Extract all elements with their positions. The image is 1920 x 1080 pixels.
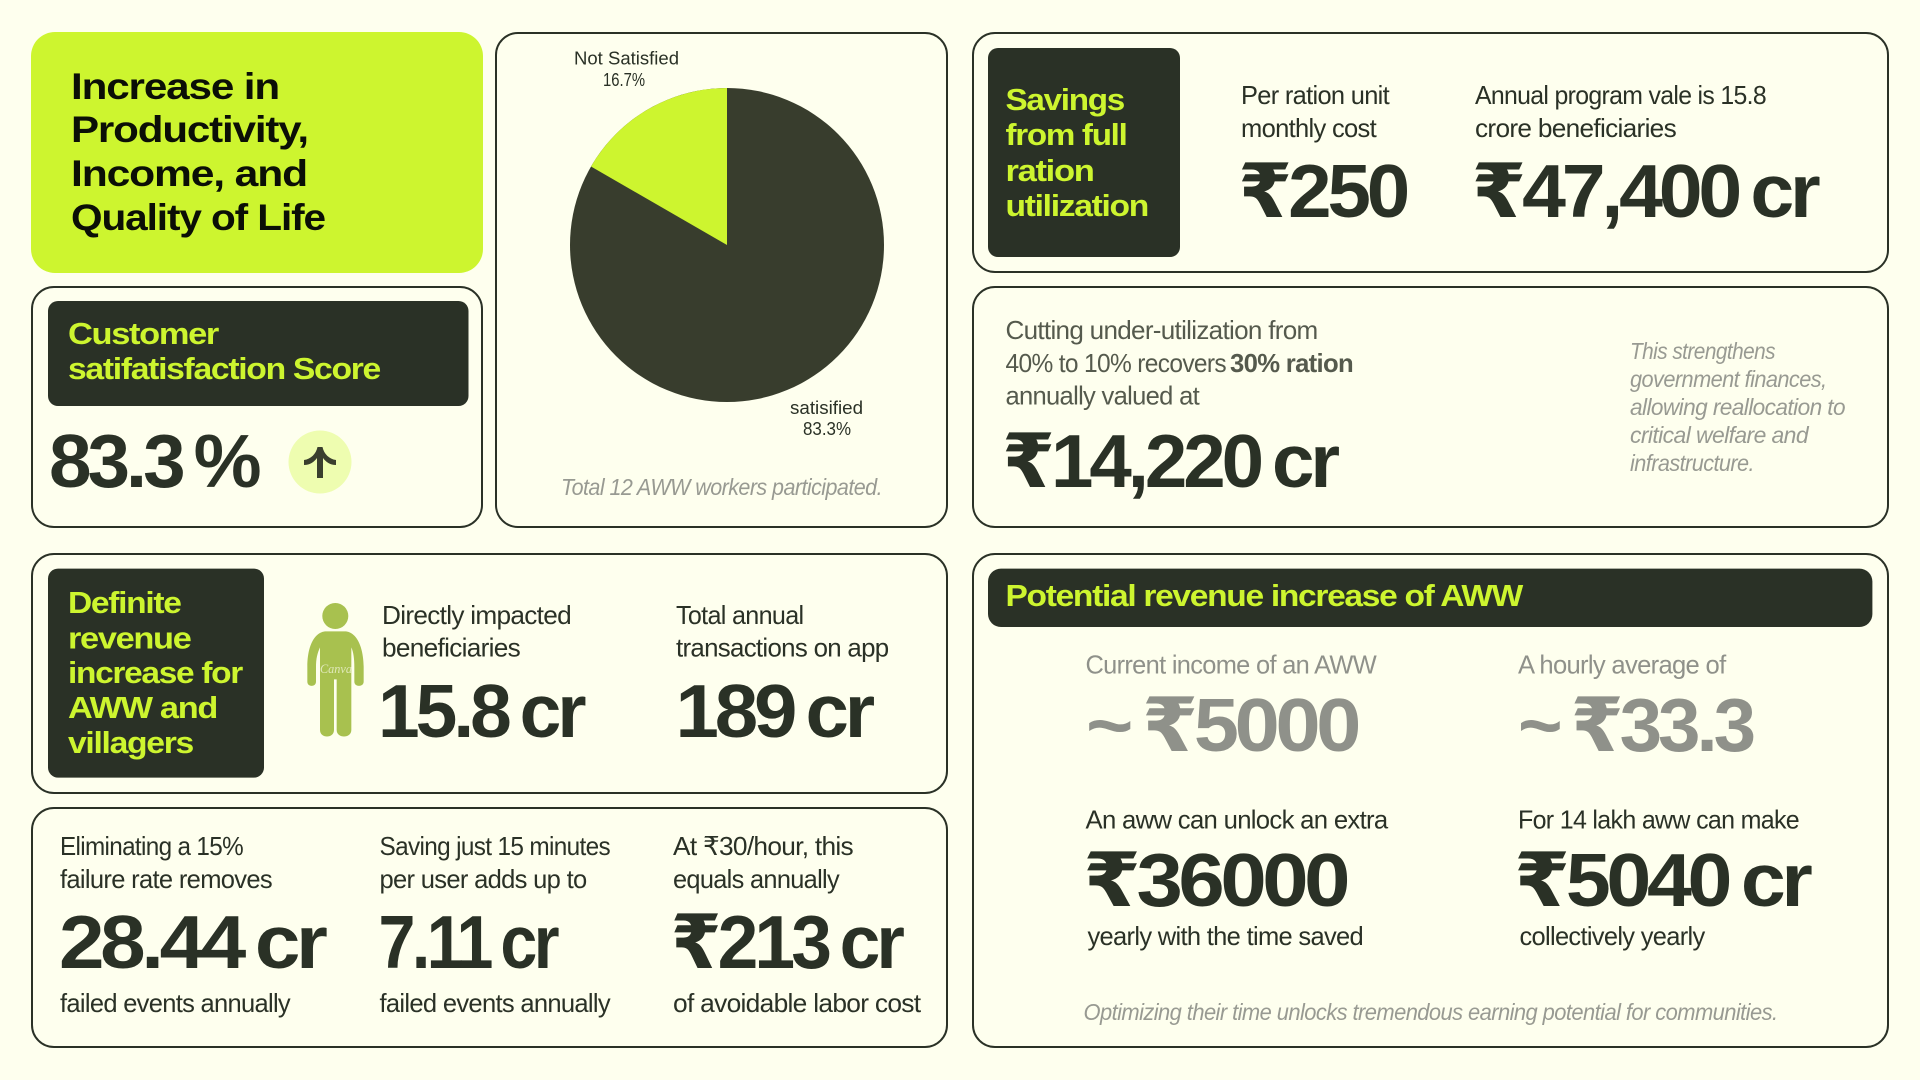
heading: increase in productivity: Income, and (71, 153, 307, 194)
stat: total annual transactions: 189 cr (676, 669, 875, 753)
stat: annual program value: crore beneficiaries (1475, 113, 1677, 143)
stat: per ration unit cost: monthly cost (1241, 113, 1377, 143)
stat: directly impacted beneficiaries: Directly impacted (382, 600, 571, 630)
stat: extra per worker: yearly with the time saved (1088, 921, 1363, 951)
stat: hourly average (1518, 650, 1753, 767)
pie label: satisfied: 83.3% (803, 419, 851, 439)
stat: recovered ration value: 40% to 10% recovers (1006, 348, 1227, 378)
stat: failed events removed: failure rate removes (60, 864, 273, 894)
heading badge: potential revenue: Potential revenue increase of AWW (1006, 578, 1524, 613)
heading: increase in productivity (71, 66, 325, 238)
heading: increase in productivity: Productivity, (71, 109, 308, 150)
panel: cutting under-utilization (973, 287, 1888, 527)
side note: government finances: government finances, (1630, 366, 1826, 392)
pie chart (570, 88, 884, 402)
heading badge: definite revenue: villagers (68, 725, 193, 760)
stat: avoidable labor cost (671, 831, 922, 1018)
stat: minutes saved: 7.11 cr (378, 900, 559, 984)
stat: annual program value: ₹47,400 cr (1472, 149, 1820, 233)
panel: pie chart (496, 33, 947, 527)
heading badge: savings: ration (1006, 153, 1094, 188)
stat: hourly average: A hourly average of (1518, 650, 1727, 680)
stat: recovered ration value: annually valued at (1006, 381, 1200, 411)
stat: directly impacted beneficiaries: 15.8 cr (378, 669, 586, 753)
stat: minutes saved: failed events annually (380, 988, 611, 1018)
stat: failed events removed: 28.44 cr (59, 900, 328, 984)
heading: increase in productivity: Quality of Life (71, 197, 325, 238)
stat: current income: ~ ₹5000 (1086, 683, 1358, 767)
side note: government finances (1630, 338, 1846, 476)
panel: savings from full ration utilization (973, 33, 1888, 272)
heading: increase in productivity: Increase in (71, 66, 279, 107)
stat: per ration unit cost (1238, 80, 1407, 233)
panel: definite revenue increase (32, 554, 947, 793)
panel: customer satisfaction score (32, 287, 482, 527)
stat: directly impacted beneficiaries (378, 600, 586, 753)
heading badge: savings: utilization (1006, 188, 1148, 223)
heading badge: definite revenue (48, 569, 264, 778)
closing note: Optimizing their time unlocks tremendous earning potential for communities. (1084, 999, 1778, 1025)
heading badge: definite revenue: AWW and (68, 690, 217, 725)
stat: collective earnings: For 14 lakh aww can make (1518, 805, 1799, 835)
icon: up arrow (288, 430, 352, 494)
panel: eliminating failures (32, 808, 947, 1047)
stat: minutes saved (378, 831, 611, 1018)
icon: person (307, 603, 364, 736)
heading badge: savings: from full (1006, 117, 1126, 152)
heading badge: customer satisfaction: Customer (68, 316, 219, 351)
stat: recovered ration value: Cutting under-utilization from (1006, 315, 1318, 345)
stat: collective earnings: ₹5040 cr (1514, 838, 1813, 922)
side note: government finances: This strengthens (1630, 338, 1776, 364)
side note: government finances: critical welfare and (1630, 422, 1810, 448)
stat: collective earnings (1514, 805, 1813, 951)
heading badge: savings: Savings (1006, 82, 1124, 117)
heading badge: customer satisfaction (48, 301, 468, 406)
heading badge: potential revenue (988, 569, 1872, 627)
stat: failed events removed (59, 831, 328, 1018)
side note: government finances: infrastructure. (1630, 450, 1754, 476)
stat: current income (1086, 650, 1377, 767)
pie label: satisfied: satisified (790, 398, 863, 418)
stat: per ration unit cost: Per ration unit (1241, 80, 1390, 110)
icon: person: Canva (320, 661, 352, 676)
stat: avoidable labor cost: At ₹30/hour, this (673, 831, 854, 861)
stat: per ration unit cost: ₹250 (1238, 149, 1407, 233)
score value: 83.3 % (49, 419, 260, 503)
pie label: not satisfied (574, 48, 679, 90)
chart note: Total 12 AWW workers participated. (561, 474, 882, 500)
stat: total annual transactions (676, 600, 889, 753)
pie label: not satisfied: Not Satisfied (574, 48, 679, 68)
heading badge: definite revenue: revenue (68, 620, 192, 656)
panel: potential revenue increase of AWW (973, 554, 1888, 1047)
stat: collective earnings: collectively yearly (1520, 921, 1705, 951)
stat: extra per worker: An aww can unlock an extra (1086, 805, 1389, 835)
stat: minutes saved: per user adds up to (380, 864, 587, 894)
heading badge: definite revenue: increase for (68, 655, 243, 690)
stat: failed events removed: Eliminating a 15% (60, 831, 244, 861)
heading badge: customer satisfaction: satifatisfaction Score (68, 351, 381, 386)
stat: total annual transactions: transactions on app (676, 632, 889, 662)
side note: government finances: allowing reallocation to (1630, 394, 1846, 420)
stat: avoidable labor cost: of avoidable labor cost (673, 988, 922, 1018)
heading badge: definite revenue: Definite (68, 585, 182, 620)
stat: avoidable labor cost: ₹213 cr (671, 900, 905, 984)
stat: directly impacted beneficiaries: beneficiaries (382, 632, 521, 662)
stat: minutes saved: Saving just 15 minutes (380, 831, 611, 861)
stat: annual program value: Annual program vale is 15.8 (1475, 80, 1766, 110)
stat: annual program value (1472, 80, 1820, 233)
stat: total annual transactions: Total annual (676, 600, 803, 630)
stat: extra per worker: ₹36000 (1083, 838, 1347, 922)
stat: avoidable labor cost: equals annually (673, 864, 840, 894)
stat: failed events removed: failed events annually (60, 988, 291, 1018)
heading badge: savings (988, 48, 1180, 257)
stat: recovered ration value: 30% ration (1230, 348, 1353, 378)
stat: hourly average: ~ ₹33.3 (1518, 683, 1753, 767)
pie label: satisfied (790, 398, 863, 439)
panel: title (31, 32, 483, 273)
stat: recovered ration value (1002, 315, 1353, 503)
stat: recovered ration value: ₹14,220 cr (1002, 419, 1340, 503)
stat: extra per worker (1083, 805, 1389, 951)
stat: current income: Current income of an AWW (1086, 650, 1377, 680)
pie label: not satisfied: 16.7% (603, 70, 645, 90)
